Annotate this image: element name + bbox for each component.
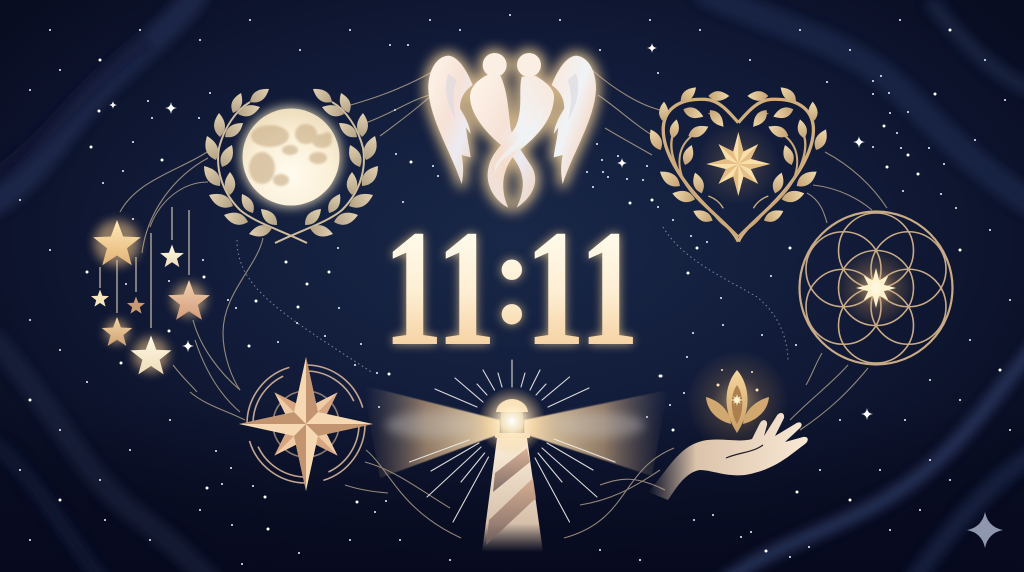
angel glow: [428, 53, 596, 208]
hanging stars: [91, 207, 210, 374]
corner sparkle mark: [967, 512, 1003, 548]
compass star diagonal points: [255, 373, 357, 475]
light beams: [362, 385, 668, 478]
star glows: [94, 220, 206, 373]
right figure: [488, 53, 554, 208]
wings: [428, 56, 596, 184]
moon with laurel wreath: [199, 85, 383, 243]
numerals: 11: [525, 196, 639, 381]
heart center star: [706, 132, 770, 196]
laurel right: [275, 85, 383, 243]
lamp glow: [478, 387, 546, 455]
lighthouse: [362, 360, 668, 552]
moon disc: [242, 108, 340, 206]
compass rings: [247, 365, 365, 483]
rose star: [168, 280, 210, 320]
small rose star: [127, 296, 145, 314]
moon maria: [249, 124, 332, 186]
tower: [482, 438, 543, 552]
numerals: [383, 196, 639, 381]
vine right: [738, 84, 831, 242]
numerals glow: 11: [383, 196, 496, 381]
tower stripes: [486, 448, 536, 545]
star strings: [100, 207, 189, 328]
numerals glow: [383, 196, 639, 381]
numerals: :: [495, 212, 529, 347]
flower of life: [800, 212, 952, 364]
compass rose: [239, 357, 373, 491]
small cream star: [160, 244, 184, 267]
laurel left: [199, 85, 307, 243]
light rays: [410, 360, 615, 522]
sparkles: [109, 43, 873, 420]
vine left: [646, 84, 738, 242]
gallery: [495, 433, 530, 438]
dome: [496, 399, 528, 412]
left figure: [470, 53, 535, 208]
dotted trails: [237, 227, 788, 373]
numerals glow: :: [495, 212, 529, 347]
small star left: [91, 290, 109, 307]
large gold star: [93, 220, 141, 265]
lotus flame: [706, 369, 769, 433]
heart of leaves with star: [646, 84, 831, 242]
palm crease: [726, 445, 763, 458]
bright star: [131, 336, 171, 374]
hand: [648, 413, 808, 500]
compass star long points: [239, 357, 373, 491]
hand with lotus: [648, 350, 808, 500]
star glow: [697, 122, 780, 206]
flower star: [856, 268, 896, 308]
medium gold star: [102, 317, 132, 346]
lantern room: [501, 411, 523, 433]
connecting threads: [120, 70, 887, 538]
angels: [428, 53, 596, 208]
numerals: 11: [383, 196, 496, 381]
flower center glow: [836, 248, 916, 328]
lotus glow: [686, 350, 790, 454]
numerals glow: 11: [525, 196, 639, 381]
11:11 numerals: [383, 196, 639, 381]
moon glow: [240, 106, 342, 208]
flower circles: [800, 212, 952, 364]
